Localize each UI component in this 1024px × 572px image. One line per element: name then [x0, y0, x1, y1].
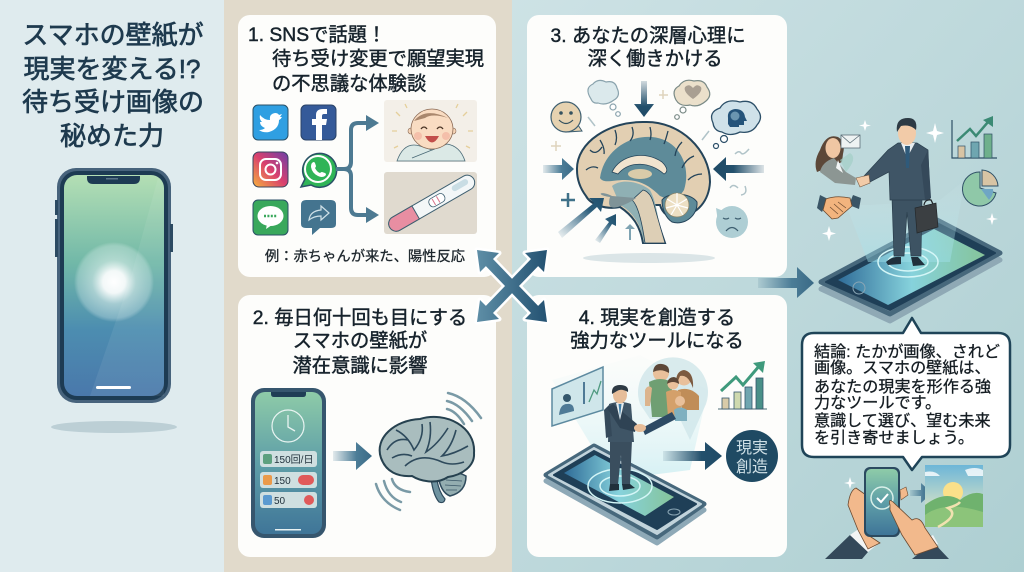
icon: glowing smartphone: [55, 168, 173, 403]
icon: instagram: [253, 152, 288, 187]
panel: card 1: [238, 15, 496, 277]
icon: bar chart: [952, 116, 997, 158]
heading: card 1: [248, 24, 484, 95]
icon: isometric phone: [546, 446, 704, 543]
icon: handshake: [817, 195, 861, 219]
icon: family circle: [638, 357, 708, 440]
title: 秘めた力: [60, 121, 164, 151]
icon: twitter: [253, 105, 288, 140]
arrow: branching to results: [336, 115, 379, 223]
callout: conclusion: [802, 318, 1010, 470]
arrow: top: [634, 81, 654, 117]
title: [22, 20, 204, 151]
heading: card 4: [570, 307, 744, 352]
arrow: lower left diagonal: [558, 198, 604, 238]
callout: conclusion: あなたの現実を形作る強: [814, 378, 991, 396]
arrow: [910, 483, 932, 503]
title: 現実を変える!?: [24, 54, 200, 84]
panel: card 2: [238, 295, 496, 557]
heading: card 1: 待ち受け変更で願望実現: [272, 48, 484, 70]
callout: conclusion: を引き寄せましょう。: [814, 429, 974, 447]
sparkle: [844, 477, 856, 489]
arrow: right: [713, 157, 764, 181]
heading: card 1: 1. SNSで話題！: [248, 24, 386, 46]
icon: pie chart: [962, 170, 998, 206]
illustration: hands holding phone: [825, 465, 983, 559]
brain shadow: [583, 253, 715, 263]
icon: sad face: [716, 206, 748, 238]
icon: phone with usage stats: 50: [274, 496, 286, 507]
heading: card 2: 2. 毎日何十回も目にする: [253, 307, 467, 329]
light beam: [846, 180, 965, 262]
landscape picture: [925, 465, 983, 527]
icon: phone with usage stats: 150: [274, 476, 291, 487]
arrow: to reality creation: [663, 442, 722, 470]
illustration: businessman on phone: [816, 116, 1000, 321]
icon: whatsapp: [301, 153, 337, 187]
illustration: pregnancy test: [384, 172, 477, 234]
icon: sparkles: [822, 120, 998, 241]
phone shadow: [51, 421, 177, 433]
heading: card 3: [551, 25, 745, 70]
right hand: [889, 501, 938, 555]
title: スマホの壁紙が: [22, 20, 204, 50]
badge: reality creation: 現実: [736, 439, 768, 457]
icon: heart thought cloud: [674, 80, 710, 119]
icon: brain cross-section: [577, 122, 710, 243]
heading: card 3: 深く働きかける: [588, 48, 722, 70]
icon: line chat: [253, 200, 288, 235]
decorative marks: [588, 117, 749, 195]
woman: [816, 136, 856, 185]
icon: businessman: [604, 385, 646, 491]
icon: brain with waves: [376, 393, 481, 510]
icon: envelope: [841, 135, 860, 148]
arrow: lower diagonal: [595, 214, 616, 243]
heading: card 2: 潜在意識に影響: [293, 355, 427, 377]
callout: conclusion: 意識して選び、望む未来: [814, 412, 991, 430]
icon: phone with usage stats: 150回/日: [274, 454, 313, 466]
badge: reality creation: [726, 430, 778, 482]
heading: card 3: 3. あなたの深層心理に: [551, 25, 745, 47]
icon: facebook: [301, 105, 336, 140]
left hand: [848, 488, 880, 549]
heading: card 4: 4. 現実を創造する: [579, 307, 735, 329]
heading: card 4: 強力なツールになる: [570, 330, 744, 352]
label: card 1 example: 例：赤ちゃんが来た、陽性反応: [265, 248, 465, 265]
arrow: left: [543, 158, 574, 180]
callout: conclusion: 結論: たかが画像、されど: [814, 343, 1000, 361]
panel: beige background: [224, 0, 512, 572]
arrow: small up: [625, 224, 635, 240]
badge: reality creation: 創造: [736, 458, 768, 476]
hologram beam: [552, 355, 708, 480]
icon: plus marks: [551, 90, 668, 207]
icon: phone with usage stats: [251, 388, 326, 538]
panel: left background: [0, 0, 224, 572]
phone: [864, 467, 900, 537]
panel: card 3: [527, 15, 787, 277]
heading: card 2: [253, 307, 467, 377]
panel: card 4: [527, 295, 787, 557]
icon: head thought cloud: [712, 101, 760, 148]
arrow: to conclusion figure: [758, 267, 814, 298]
icon: rising chart: [718, 361, 767, 409]
icon: smile face: [551, 102, 582, 132]
icon: share: [301, 200, 336, 235]
heading: card 2: スマホの壁紙が: [293, 330, 427, 352]
arrow: four-way cross: [477, 250, 547, 322]
businessman: [856, 118, 938, 266]
phone: [821, 220, 1000, 321]
illustration: baby: [384, 100, 477, 162]
callout: conclusion: 画像。スマホの壁紙は、: [814, 359, 991, 377]
heading: card 1: の不思議な体験談: [272, 73, 426, 95]
icon: floating panel: [552, 367, 603, 426]
title: 待ち受け画像の: [22, 87, 204, 117]
sleeves: [825, 535, 949, 559]
callout: conclusion: 力なツールです。: [814, 394, 941, 412]
arrow: phone to brain: [333, 442, 372, 470]
panel: teal background: [512, 0, 1024, 572]
icon: thought cloud: [588, 80, 620, 116]
